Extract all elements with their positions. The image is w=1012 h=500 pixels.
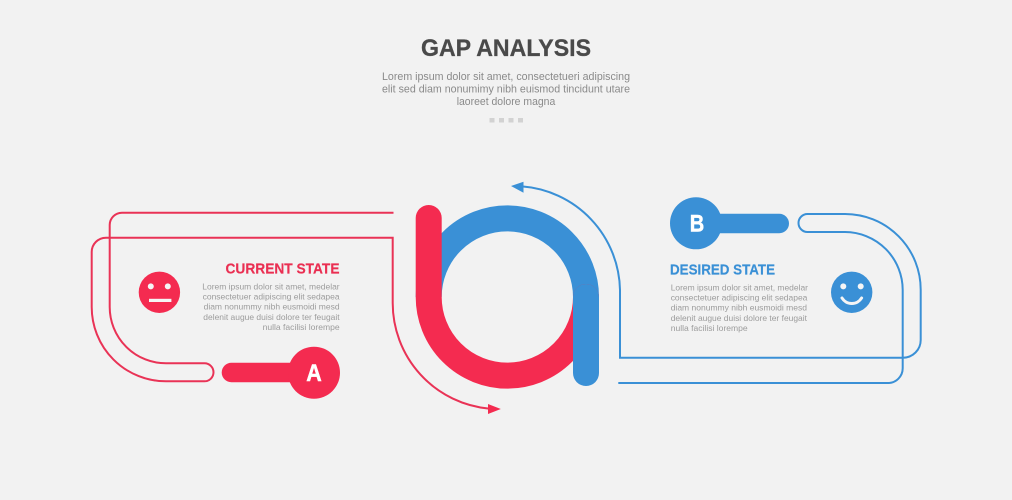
title: GAP ANALYSIS [421, 35, 591, 62]
body text: current state: Lorem ipsum dolor sit amet, medelar [202, 281, 340, 291]
central gap ring [429, 218, 586, 376]
header block [382, 35, 630, 122]
badge B [670, 197, 789, 249]
body text: current state [202, 281, 340, 332]
body text: current state: delenit augue duisi dolore ter feugait [203, 312, 340, 322]
heading: desired state: DESIRED STATE [670, 262, 775, 278]
blue right stem [573, 297, 599, 373]
body text: desired state: consectetuer adipiscing elit sedapea [671, 292, 808, 302]
subtitle text: Lorem ipsum dolor sit amet, consectetueri adipiscing [382, 71, 630, 83]
body text: desired state [671, 282, 808, 333]
pagination dots [490, 118, 523, 122]
body text: desired state: nulla facilisi lorempe [671, 323, 748, 333]
body text: desired state: diam nonummy nibh eusmoidi mesd [671, 303, 807, 313]
icon: smiling face [831, 272, 872, 313]
body text: current state: consectetuer adipiscing elit sedapea [203, 292, 340, 302]
badge B: B [690, 211, 704, 238]
body text: desired state: delenit augue duisi dolore ter feugait [671, 313, 808, 323]
panel: desired state [511, 182, 921, 383]
blue outline path with arrow [511, 182, 921, 383]
badge A [222, 347, 340, 399]
body text: current state: diam nonummy nibh eusmoidi mesd [204, 302, 340, 312]
body text: desired state: Lorem ipsum dolor sit amet, medelar [671, 282, 808, 292]
red outline path with arrow [92, 213, 501, 414]
red lower arc with rounded top [429, 218, 586, 376]
blue upper arc [429, 218, 586, 297]
panel: current state [92, 213, 501, 414]
heading: current state: CURRENT STATE [226, 260, 340, 278]
icon: neutral face [139, 272, 180, 313]
body text: current state: nulla facilisi lorempe [263, 322, 340, 332]
badge A: A [306, 360, 322, 387]
subtitle text: elit sed diam nonumimy nibh euismod tincidunt utare [382, 84, 630, 96]
subtitle text [382, 71, 630, 108]
subtitle text: laoreet dolore magna [457, 96, 555, 108]
